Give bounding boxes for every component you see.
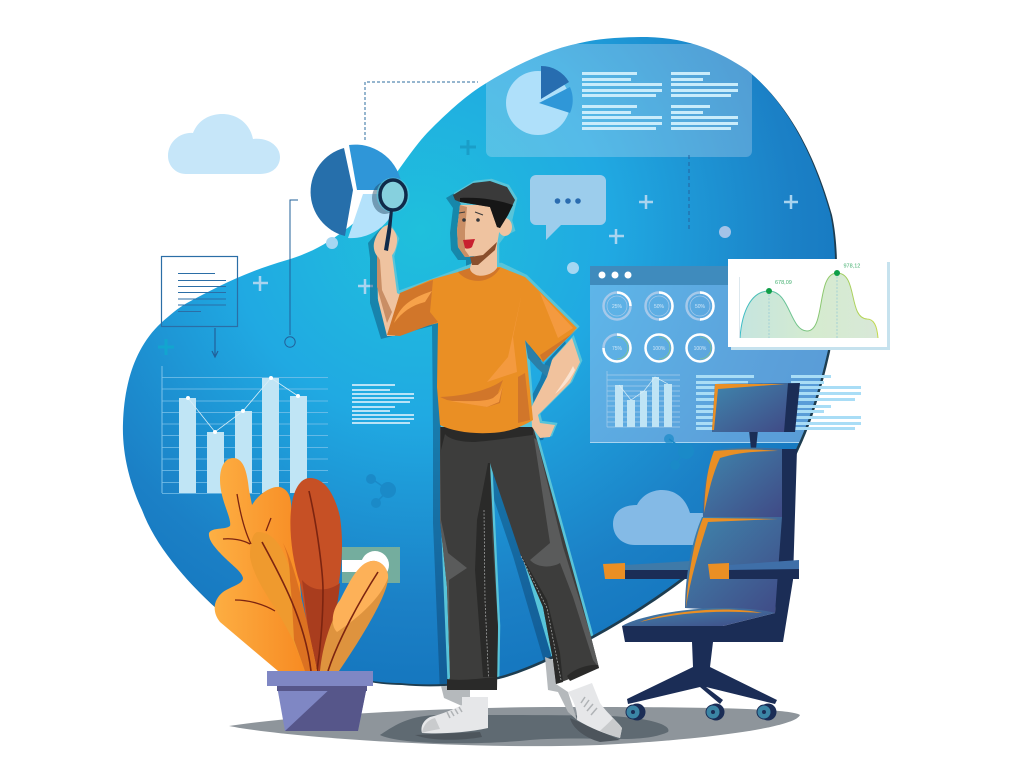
- right arm and hand on hip: [531, 338, 580, 438]
- molecule icon: right: [664, 434, 694, 470]
- value labels: 978,12: [844, 264, 860, 270]
- bar chart: main: [162, 366, 328, 494]
- progress rings: 100%: [694, 346, 707, 352]
- dashed connector from report card: [688, 155, 690, 230]
- chair back frame and seat base: [622, 449, 797, 642]
- connector line with circle: [285, 200, 298, 347]
- raised arm and hand: [374, 225, 410, 336]
- leaf: middle: [250, 532, 317, 671]
- leaf: red: [290, 478, 342, 671]
- chair armrest left: [603, 561, 697, 579]
- chair upper back: [703, 448, 782, 517]
- document card: [162, 256, 238, 326]
- value labels: [775, 264, 860, 286]
- progress rings: 50%: [654, 304, 665, 310]
- trousers: [440, 427, 599, 690]
- chair headrest: [712, 383, 800, 432]
- cloud: top left: [168, 114, 280, 174]
- chair headrest neck: [749, 430, 758, 449]
- progress rings: 75%: [612, 346, 623, 352]
- window buttons: [598, 272, 632, 278]
- office chair: [603, 383, 800, 720]
- head: [453, 181, 515, 265]
- chair base and wheels: [626, 642, 777, 720]
- panel: area chart card: [728, 259, 890, 350]
- large pie chart: [311, 145, 401, 238]
- pot: [267, 671, 373, 731]
- man shadow: [368, 194, 566, 684]
- molecule icon: left: [366, 474, 396, 508]
- shadow under sleeve: [525, 340, 553, 377]
- dashboard bar chart: [607, 371, 680, 427]
- left shoe: [421, 697, 488, 733]
- dashboard text lines: [696, 375, 861, 430]
- cloud: lower right: [613, 490, 704, 545]
- panel: dashboard: [590, 266, 861, 443]
- pie chart in report card: [506, 66, 573, 135]
- chair armrest right: [708, 560, 799, 579]
- man outline: [376, 180, 600, 688]
- panel: top report card: [486, 44, 752, 157]
- green slider card: [342, 547, 400, 583]
- background blob: [123, 37, 835, 684]
- man: [368, 178, 622, 742]
- speech bubble: [530, 175, 606, 240]
- value labels: 678,09: [775, 280, 792, 286]
- ground contact shadows: [415, 718, 620, 742]
- orange t-shirt: [387, 267, 577, 433]
- infographic illustration: [122, 37, 890, 746]
- ground shadow: [229, 707, 800, 746]
- potted plant: [209, 458, 388, 731]
- leaf veins: [223, 494, 275, 611]
- chair seat: [622, 608, 775, 626]
- right shoe: [568, 683, 622, 738]
- dashed connector to pie chart: [365, 82, 478, 140]
- hair: [453, 181, 515, 228]
- leaf: right: [320, 561, 388, 671]
- report text lines: [582, 72, 738, 130]
- progress rings: 100%: [653, 346, 666, 352]
- progress rings: [604, 292, 714, 362]
- arrow: document to bar chart: [212, 328, 218, 357]
- neck: [470, 243, 497, 276]
- chair lower back: [685, 517, 782, 613]
- progress rings: 50%: [695, 304, 706, 310]
- leaf: large oak: [209, 458, 307, 671]
- plus signs and dots: [158, 140, 798, 355]
- text lines: centre left: [352, 384, 414, 424]
- progress rings: 25%: [612, 304, 623, 310]
- background blob edge: [125, 39, 837, 686]
- magnifying glass: [372, 178, 410, 251]
- shoe shadows: [441, 657, 577, 720]
